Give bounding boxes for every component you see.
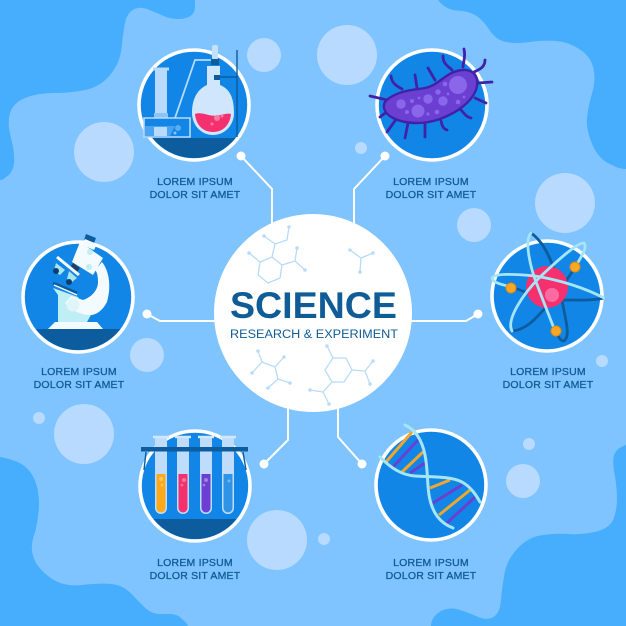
connectors [142, 152, 482, 468]
title: SCIENCE [230, 285, 397, 326]
label: bacterium: DOLOR SIT AMET [386, 189, 477, 201]
icon: test tubes [140, 431, 250, 544]
label: flask: LOREM IPSUM [157, 176, 233, 188]
label: test tubes: DOLOR SIT AMET [150, 570, 241, 582]
label: atom: LOREM IPSUM [510, 366, 586, 378]
label: microscope: DOLOR SIT AMET [34, 379, 125, 391]
icon: flask [138, 45, 250, 164]
label: DNA: LOREM IPSUM [393, 557, 469, 569]
label: microscope: LOREM IPSUM [41, 366, 117, 378]
icon: DNA [376, 425, 486, 540]
background blob: top left [0, 0, 195, 180]
label: bacterium: LOREM IPSUM [393, 176, 469, 188]
central circle [214, 214, 412, 412]
molecule decorations [247, 225, 375, 406]
label: microscope [34, 366, 125, 391]
label: flask [150, 176, 241, 201]
background blob: bottom right [431, 445, 626, 626]
icon: microscope [23, 234, 133, 354]
label: atom: DOLOR SIT AMET [503, 379, 594, 391]
icon: atom [492, 233, 604, 351]
icon: bacterium [370, 49, 492, 160]
background blob: top right [438, 0, 626, 169]
background blob: bottom left [0, 457, 188, 626]
subtitle: RESEARCH & EXPERIMENT [230, 327, 398, 341]
decorative bubbles [33, 25, 608, 570]
label: DNA [386, 557, 477, 582]
label: DNA: DOLOR SIT AMET [386, 570, 477, 582]
label: flask: DOLOR SIT AMET [150, 189, 241, 201]
label: atom [503, 366, 594, 391]
label: test tubes [150, 557, 241, 582]
label: test tubes: LOREM IPSUM [157, 557, 233, 569]
label: bacterium [386, 176, 477, 201]
